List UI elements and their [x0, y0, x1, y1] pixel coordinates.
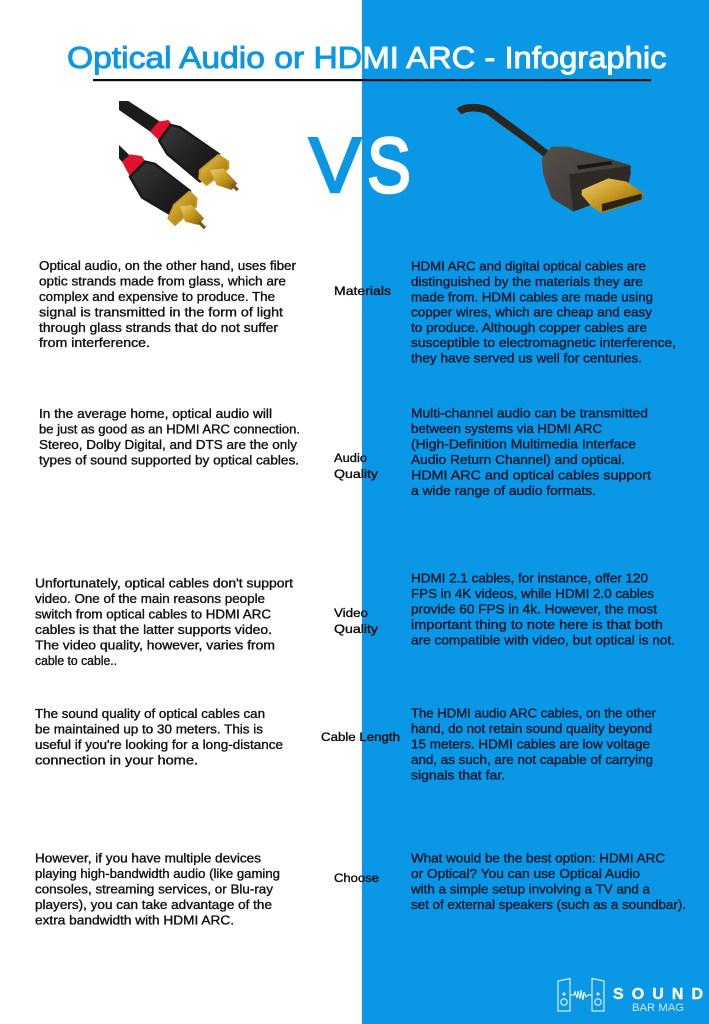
text: left column, audio quality: types of sound supported by optical cables. [39, 454, 299, 468]
text: right column, audio quality: (High-Definition Multimedia Interface [411, 438, 636, 452]
text: left column, cable length: useful if you're looking for a long-distance [35, 738, 283, 752]
label: Choose: Choose [334, 871, 379, 885]
label: Audio Quality [334, 451, 379, 481]
icon: speakers and sound wave [558, 978, 604, 1011]
text: right column, cable length: The HDMI audio ARC cables, on the other [411, 706, 656, 720]
text: left column, materials: optic strands made from glass, which are [39, 274, 286, 288]
text: left column, video quality [35, 576, 294, 668]
text: left column, materials [39, 259, 296, 350]
text: left column, materials: from interference. [39, 336, 150, 350]
label: Cable Length: Cable Length [321, 730, 400, 744]
text: right column, video quality: are compatible with video, but optical is not. [411, 634, 675, 648]
label: Audio Quality: Audio [334, 451, 367, 465]
text: left column, materials: signal is transmitted in the form of light [39, 306, 284, 320]
text: right column, video quality: provide 60 FPS in 4k. However, the most [411, 602, 658, 616]
label: Audio Quality: Quality [334, 467, 379, 481]
text: left column, choose: consoles, streaming services, or Blu-ray [35, 882, 274, 896]
text: right column, choose [410, 852, 686, 912]
text: right column, choose: or Optical? You can use Optical Audio [411, 867, 640, 881]
text: right column, audio quality [411, 406, 652, 498]
icon: optical audio cables [119, 101, 239, 229]
text: right column, audio quality: HDMI ARC and optical cables support [411, 468, 652, 482]
logo tagline: BAR MAG [632, 1002, 684, 1014]
logo wordmark: SOUND [613, 986, 703, 1003]
text: left column, audio quality [39, 407, 300, 468]
text: left column, audio quality: Stereo, Dolby Digital, and DTS are the only [39, 438, 298, 452]
text: left column, video quality: The video quality, however, varies from [35, 638, 275, 652]
text: right column, materials: copper wires, which are cheap and easy [411, 306, 653, 320]
icon: HDMI cable [459, 108, 644, 213]
text: left column, choose: However, if you have multiple devices [35, 852, 261, 866]
lower optical plug [119, 145, 206, 229]
text: left column, choose: playing high-bandwidth audio (like gaming [35, 867, 280, 881]
text: right column, choose: set of external speakers (such as a soundbar). [411, 898, 686, 912]
text: right column, choose: What would be the best option: HDMI ARC [411, 852, 665, 866]
text: right column, cable length: and, as such, are not capable of carrying [411, 753, 653, 767]
text: left column, video quality: Unfortunately, optical cables don't support [35, 576, 294, 590]
VS heading [309, 121, 411, 209]
text: left column, video quality: switch from optical cables to HDMI ARC [35, 608, 271, 622]
text: right column, materials: distinguished by the materials they are [411, 275, 643, 289]
text: left column, cable length [35, 707, 283, 768]
VS heading: S [367, 121, 411, 209]
text: left column, audio quality: In the average home, optical audio will [39, 407, 272, 421]
text: left column, cable length: connection in your home. [35, 754, 198, 768]
text: right column, audio quality: Audio Return Channel) and optical. [411, 453, 625, 467]
VS heading: V [309, 121, 361, 209]
text: left column, cable length: The sound quality of optical cables can [35, 707, 265, 721]
text: left column, choose: extra bandwidth with HDMI ARC. [35, 914, 234, 928]
text: right column, cable length [411, 706, 656, 782]
text: right column, materials: susceptible to electromagnetic interference, [411, 336, 676, 350]
text: left column, video quality: cable to cable.. [35, 654, 117, 668]
logo: Sound Bar Mag [558, 978, 703, 1014]
label: Video Quality [334, 606, 379, 636]
text: left column, audio quality: be just as good as an HDMI ARC connection. [39, 422, 300, 436]
text: right column, choose: with a simple setup involving a TV and a [410, 882, 650, 896]
text: left column, materials: complex and expensive to produce. The [39, 290, 275, 304]
label: Materials: Materials [334, 284, 391, 298]
title [67, 41, 666, 75]
upper optical plug [119, 101, 239, 191]
label: Video Quality: Video [334, 606, 368, 620]
title: Optical Audio or HD [67, 41, 362, 75]
text: right column, video quality [411, 572, 675, 648]
text: left column, video quality: video. One of the main reasons people [35, 592, 265, 606]
text: right column, materials [411, 260, 676, 366]
text: left column, cable length: be maintained up to 30 meters. This is [35, 722, 263, 736]
title: MI ARC - Infographic [362, 41, 666, 75]
text: right column, materials: HDMI ARC and digital optical cables are [411, 260, 646, 274]
text: right column, audio quality: Multi-channel audio can be transmitted [411, 406, 648, 420]
text: right column, cable length: 15 meters. HDMI cables are low voltage [411, 738, 650, 752]
text: left column, choose: players), you can take advantage of the [35, 898, 272, 912]
panel: blue right background [362, 0, 709, 1024]
text: right column, audio quality: a wide range of audio formats. [411, 484, 596, 498]
text: right column, materials: they have served us well for centuries. [411, 352, 642, 366]
text: right column, cable length: signals that far. [411, 768, 505, 782]
text: right column, materials: to produce. Although copper cables are [411, 321, 647, 335]
text: right column, video quality: important thing to note here is that both [411, 618, 663, 632]
title underline [93, 79, 651, 81]
text: right column, audio quality: between systems via HDMI ARC [411, 422, 602, 436]
text: left column, materials: Optical audio, on the other hand, uses fiber [39, 259, 296, 273]
text: left column, choose [35, 852, 280, 928]
text: left column, materials: through glass strands that do not suffer [39, 321, 278, 335]
text: right column, cable length: hand, do not retain sound quality beyond [411, 722, 652, 736]
text: right column, materials: made from. HDMI cables are made using [411, 290, 653, 304]
label: Video Quality: Quality [334, 622, 379, 636]
text: left column, video quality: cables is that the latter supports video. [35, 623, 272, 637]
text: right column, video quality: HDMI 2.1 cables, for instance, offer 120 [411, 572, 648, 586]
text: right column, video quality: FPS in 4K videos, while HDMI 2.0 cables [411, 587, 654, 601]
